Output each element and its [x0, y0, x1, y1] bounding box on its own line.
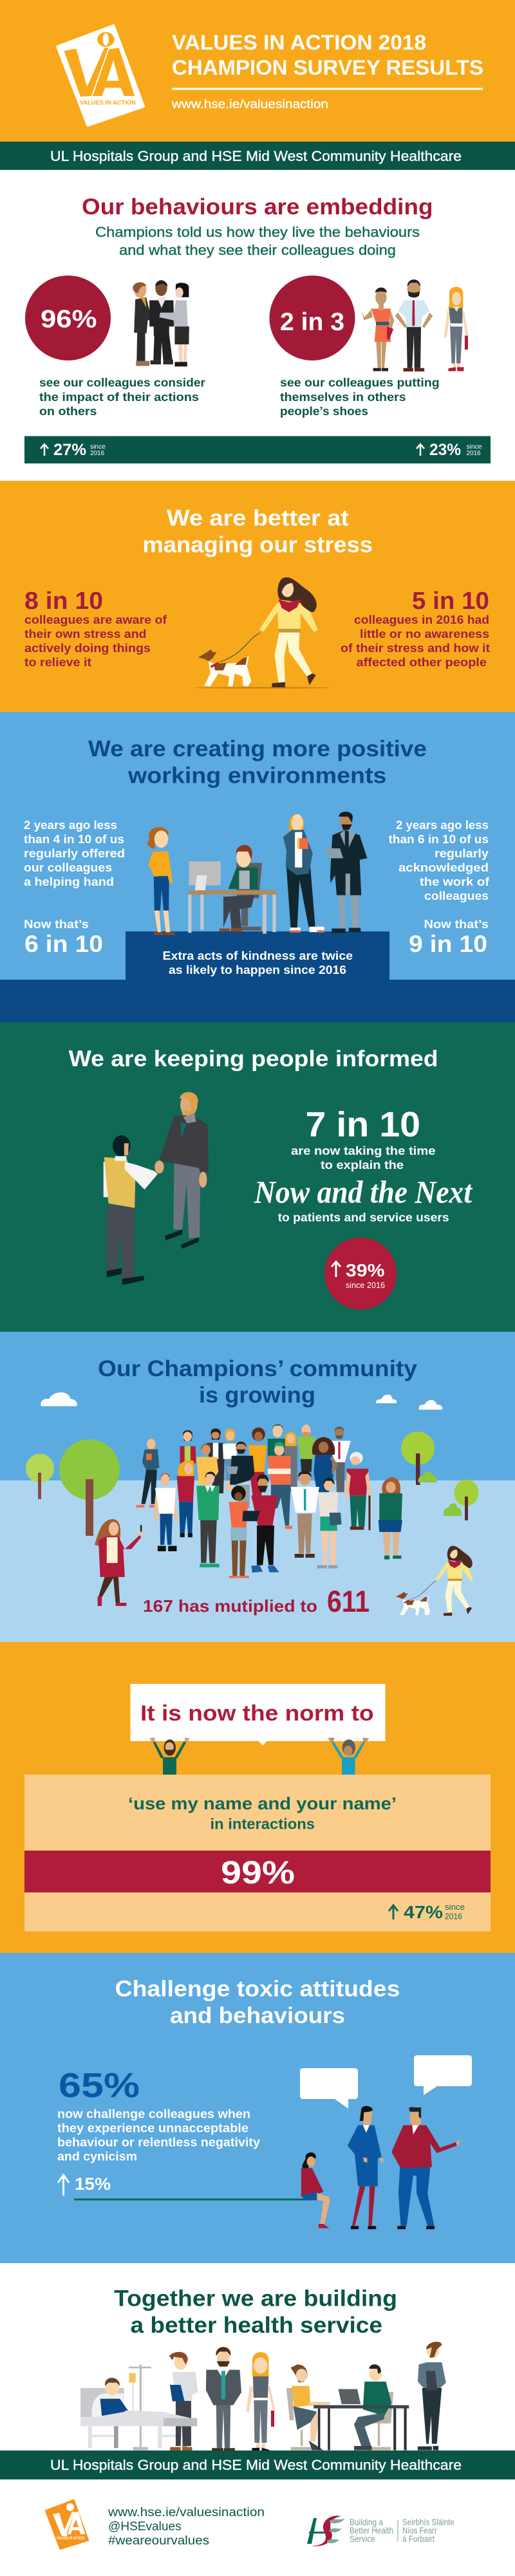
stat: up 15%: [58, 2174, 111, 2196]
stat circle: 2 in 3: [269, 275, 355, 360]
stat badge: 39%: since 2016: [346, 1281, 385, 1290]
sign: it is now the norm to: It is now the norm to: [140, 1701, 374, 1726]
arrow: up: [41, 444, 48, 456]
text: helping hand: our colleagues: [24, 861, 112, 874]
heading: We are better at: [167, 506, 349, 530]
heading: a better health service: [130, 2313, 382, 2338]
stat: 8 in 10: 8 in 10: [24, 588, 103, 615]
illustration: woman walking dog: [396, 1546, 473, 1616]
quote: [128, 1794, 397, 1833]
heading: and behaviours: [170, 2003, 345, 2028]
bench line: [74, 2199, 310, 2200]
text: helping hand: a helping hand: [24, 875, 114, 888]
band: 99%: [24, 1851, 491, 1892]
band: 99%: 99%: [221, 1854, 295, 1890]
heading: Challenge toxic attitudes: [115, 1977, 400, 2002]
panel: keeping people informed: [0, 1022, 515, 1332]
text: explain: [291, 1144, 435, 1171]
text: in others shoes: see our colleagues putting: [280, 376, 440, 389]
panel: the norm: [0, 1642, 515, 1953]
stat: 5 in 10: little or no awareness: [360, 628, 489, 640]
stat: 7 in 10: 7 in 10: [305, 1105, 420, 1144]
text: links: [108, 2506, 265, 2548]
stat: 9 in 10: Now that’s: [424, 918, 489, 931]
illustration: two men shaking hands: [104, 1092, 209, 1285]
illustration: woman walking dog: [198, 577, 318, 687]
arrow: up: [417, 444, 424, 456]
text: HSE strapline: Better Health: [350, 2525, 393, 2535]
title: CHAMPION SURVEY RESULTS: [172, 56, 483, 79]
text: HSE strapline: Níos Fearr: [402, 2525, 437, 2535]
text: in others shoes: themselves in others: [280, 391, 406, 404]
illustration: ground shadow: [193, 687, 331, 689]
heading: Our behaviours are embedding: [82, 194, 433, 219]
text: links: @HSEvalues: [108, 2520, 182, 2534]
heading: [114, 2286, 397, 2338]
text: in others shoes: [280, 376, 440, 418]
heading: working environments: [127, 763, 387, 788]
text: helping hand: [24, 819, 125, 888]
illustration: three colleagues standing: [362, 279, 469, 371]
text: challenge colleagues: now challenge colleagues when: [57, 2108, 250, 2122]
text: acknowledged work: colleagues: [424, 890, 489, 902]
illustration: healthcare team: [80, 2342, 446, 2452]
quote: in interactions: [210, 1816, 315, 1833]
stat badge: 39%: 39%: [346, 1260, 385, 1280]
heading: [98, 1356, 418, 1408]
heading: managing our stress: [143, 532, 373, 557]
banner: organisations: UL Hospitals Group and HSE Mid West Community Healthcare: [50, 2457, 462, 2473]
panel: header: [0, 0, 515, 142]
intro text: [95, 224, 420, 258]
bar: change since 2016: since: [90, 443, 106, 451]
stat: up 47% since 2016: 47%: [404, 1902, 443, 1922]
text: helping hand: 2 years ago less: [24, 819, 117, 832]
stat: 8 in 10: actively doing things: [24, 642, 151, 655]
illustration: two people holding sign: [149, 1737, 369, 1775]
icons: trees and bushes: [26, 1432, 479, 1536]
stat: 8 in 10: to relieve it: [24, 656, 91, 669]
panel: behaviours: [0, 170, 515, 481]
stat: 65%: 65%: [59, 2066, 140, 2105]
text: explain: to explain the: [321, 1159, 404, 1171]
icons: clouds: [41, 1392, 442, 1410]
stat: 6 in 10: 6 in 10: [24, 931, 103, 957]
text: 167 has multiplied to 611: 167 has mutiplied to: [143, 1596, 317, 1616]
bar: change since 2016: 23%: [429, 441, 461, 459]
title: [172, 31, 483, 90]
stat: 5 in 10: of their stress and how it: [341, 642, 490, 655]
text: helping hand: than 4 in 10 of us: [24, 833, 124, 846]
stat circle: 2 in 3: 2 in 3: [280, 308, 344, 336]
illustration: three colleagues shaking hands: [133, 280, 189, 366]
stat: 5 in 10: colleagues in 2016 had: [354, 613, 489, 626]
stat: 8 in 10: [24, 588, 167, 669]
stat: 5 in 10: 5 in 10: [412, 588, 489, 615]
text: acknowledged work: acknowledged: [398, 861, 489, 874]
text: HSE strapline: á Forbairt: [402, 2534, 435, 2544]
stat: 6 in 10: [24, 918, 103, 957]
text: 167 has multiplied to 611: 611: [327, 1584, 370, 1618]
text: consider impact: the impact of their actions: [39, 391, 199, 404]
text: acknowledged work: than 6 in 10 of us: [389, 833, 489, 846]
heading: Our Champions’ community: [98, 1356, 418, 1381]
banner: organisations: [0, 2450, 515, 2479]
text: consider impact: [39, 376, 205, 418]
platform with kindness message: [0, 931, 515, 1022]
bar: change since 2016: 27%: [53, 441, 86, 459]
text: links: #weareourvalues: [108, 2534, 209, 2548]
illustration: office colleagues: [147, 812, 367, 935]
bar: change since 2016: 2016: [466, 450, 481, 457]
stat: 5 in 10: [341, 588, 490, 669]
stat: up 47% since 2016: 2016: [445, 1912, 462, 1921]
illustration: woman taking selfie: [95, 1519, 143, 1606]
text: 167 has multiplied to 611: [143, 1584, 370, 1618]
panel: managing stress: [0, 481, 515, 712]
text: HSE strapline: [350, 2517, 454, 2544]
logo: footer Values in Action card: [46, 2501, 88, 2548]
text: acknowledged work: regularly: [435, 847, 489, 860]
text: consider impact: on others: [39, 405, 97, 418]
script: Now and the Next: Now and the Next: [254, 1174, 473, 1210]
heading: [88, 736, 427, 788]
panel: better health service: [0, 2263, 515, 2576]
web address: www.hse.ie/valuesinaction: [171, 98, 328, 111]
stat: 5 in 10: affected other people: [357, 656, 487, 669]
text: challenge colleagues: and cynicism: [57, 2151, 137, 2164]
heading: [115, 1977, 400, 2028]
platform with kindness message: Extra acts of kindness are twice: [162, 949, 353, 962]
stat circle: 96%: [25, 275, 111, 360]
text: challenge colleagues: behaviour or relentless negativity: [57, 2136, 260, 2150]
text: helping hand: regularly offered: [24, 847, 125, 860]
logo: HSE: [307, 2515, 345, 2546]
logo: Values in Action card: [58, 26, 143, 125]
text: acknowledged work: [389, 819, 490, 902]
text: consider impact: see our colleagues consider: [39, 376, 205, 389]
text: HSE strapline: Seirbhís Sláinte: [402, 2517, 454, 2527]
panel: challenge toxic attitudes: [0, 1953, 515, 2263]
speech bubbles: [300, 2055, 472, 2109]
text: explain: are now taking the time: [291, 1144, 435, 1157]
title: VALUES IN ACTION 2018: [172, 31, 426, 54]
stat: up 47% since 2016: since: [445, 1902, 465, 1912]
stat: 6 in 10: Now that’s: [24, 918, 89, 931]
bar: change since 2016: [24, 436, 491, 463]
logo: Values in Action card: VALUES IN ACTION: [80, 99, 136, 106]
text: challenge colleagues: [57, 2108, 260, 2164]
banner: organisations: [0, 142, 515, 170]
text: patients: to patients and service users: [278, 1211, 449, 1224]
stat: 9 in 10: [409, 918, 489, 957]
sign: it is now the norm to: [130, 1684, 385, 1746]
stat badge: 39%: [324, 1237, 397, 1309]
bar: change since 2016: since: [466, 443, 482, 451]
illustration: crowd of champions: [136, 1424, 402, 1578]
text: links: www.hse.ie/valuesinaction: [108, 2506, 265, 2519]
illustration: three people talking: [301, 2106, 460, 2229]
text: HSE strapline: Service: [350, 2534, 375, 2544]
heading: [143, 506, 373, 557]
panel: positive working environments: [0, 712, 515, 1022]
heading: is growing: [199, 1383, 315, 1408]
text: in others shoes: people’s shoes: [280, 405, 368, 418]
stat circle: 96%: 96%: [41, 305, 97, 333]
panel: use my name: [24, 1775, 491, 1932]
heading: We are keeping people informed: [69, 1047, 438, 1071]
intro text: Champions told us how they live the behaviours: [95, 224, 420, 240]
bar: change since 2016: 2016: [90, 450, 104, 457]
arrow: up: [332, 1262, 341, 1277]
stat: up 15%: 15%: [75, 2174, 111, 2194]
banner: organisations: UL Hospitals Group and HSE Mid West Community Healthcare: [50, 148, 462, 164]
stat: 8 in 10: their own stress and: [24, 628, 147, 640]
intro text: and what they see their colleagues doing: [119, 242, 396, 258]
heading: We are creating more positive: [88, 736, 427, 761]
platform with kindness message: as likely to happen since 2016: [169, 964, 346, 976]
logo: footer Values in Action card: VALUES IN ACTION: [57, 2536, 84, 2541]
text: challenge colleagues: they experience unnacceptable: [57, 2122, 248, 2136]
stat: 9 in 10: 9 in 10: [409, 931, 487, 957]
panel: community growing: [0, 1332, 515, 1642]
stat: 8 in 10: colleagues are aware of: [24, 613, 167, 626]
quote: ‘use my name and your name’: [128, 1794, 397, 1813]
text: acknowledged work: the work of: [420, 875, 490, 888]
text: HSE strapline: Building a: [350, 2517, 383, 2527]
heading: Together we are building: [114, 2286, 397, 2311]
text: acknowledged work: 2 years ago less: [396, 819, 489, 832]
stat: up 47% since 2016: [389, 1902, 465, 1922]
